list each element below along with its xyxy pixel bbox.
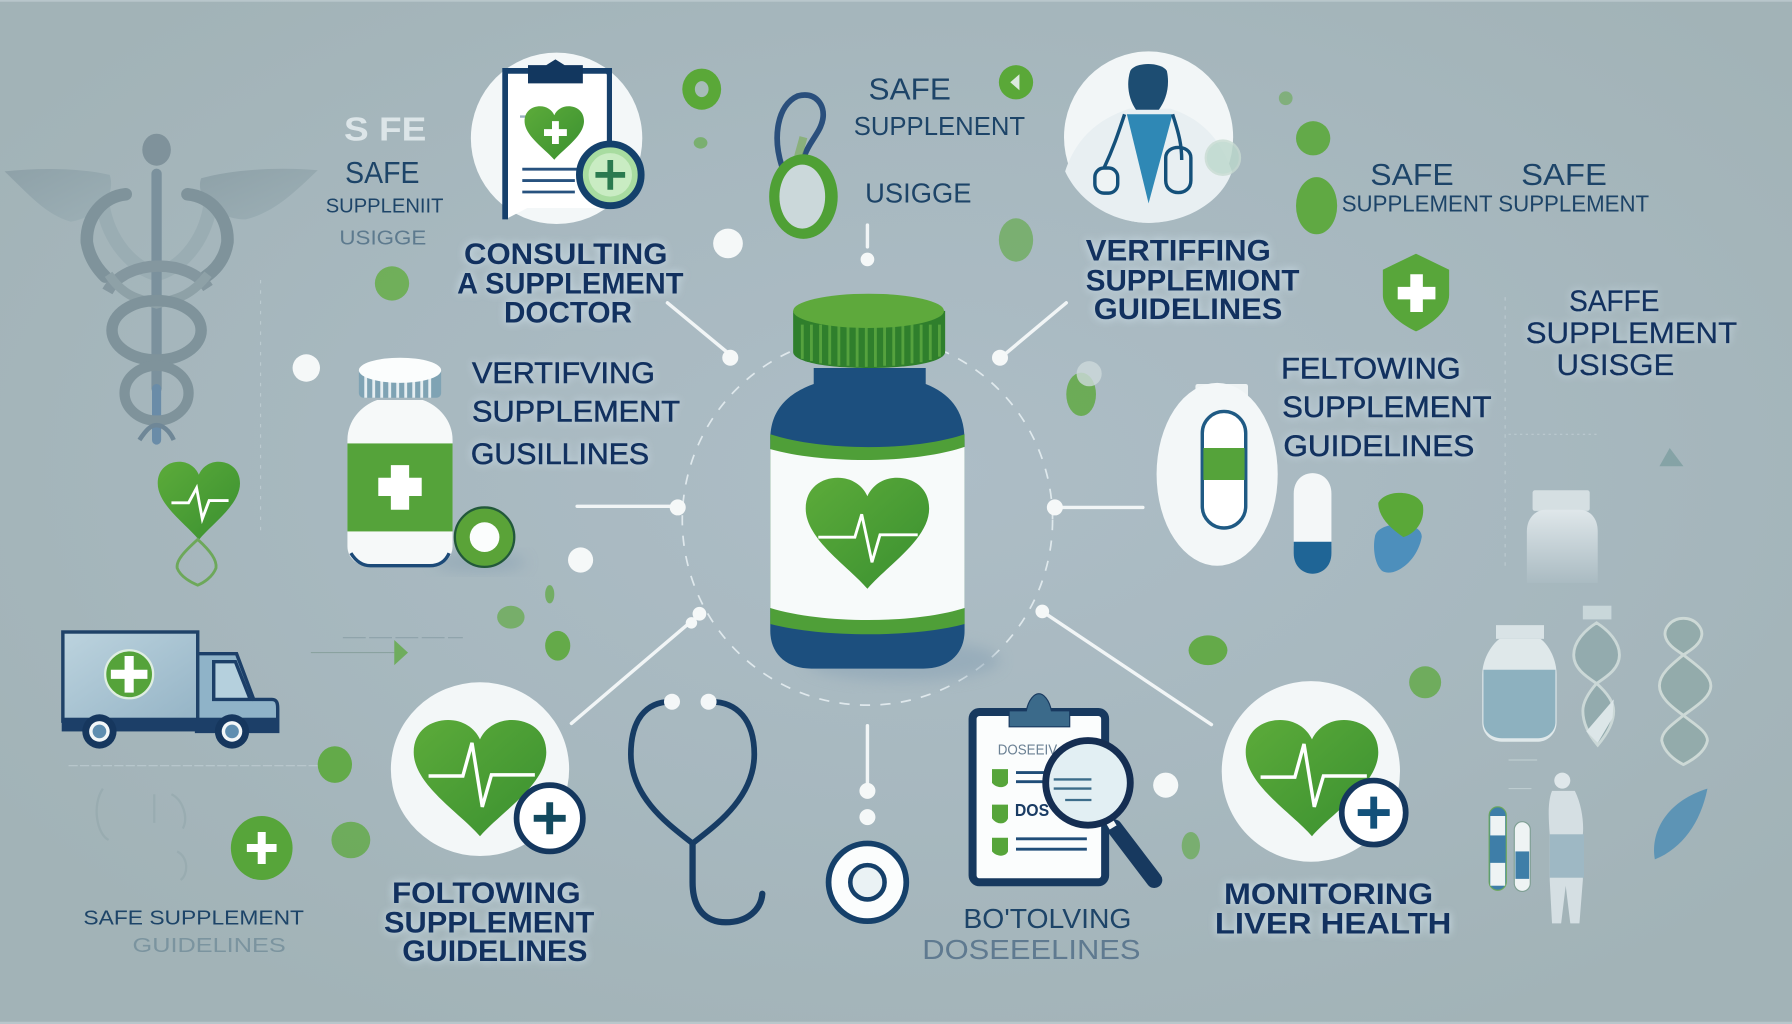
text block: twin safe supplement labels: SAFE	[1370, 157, 1454, 192]
icon: green blobs upper right	[694, 91, 1337, 416]
icon: scattered green blobs lower	[318, 585, 1441, 859]
label	[384, 877, 594, 968]
label: CONSULTING	[464, 238, 667, 271]
icon: faded bottle right	[1527, 490, 1598, 583]
text block: twin safe supplement labels: SAFE	[1521, 157, 1607, 192]
icon: green plus circle	[231, 816, 293, 880]
label: VERTIFFING	[1086, 235, 1271, 268]
icon: capsule disc and pills	[1157, 383, 1423, 574]
text block: twin safe supplement labels	[1342, 157, 1649, 216]
icon: pale bottle with liquid	[1482, 625, 1557, 742]
label: FELTOWING	[1281, 352, 1461, 385]
icon: target ring	[829, 843, 906, 921]
icon: helix one	[1574, 606, 1619, 745]
text block: top-centre safe supplement usage: SUPPLENENT	[854, 111, 1025, 141]
text block: twin safe supplement labels: SUPPLEMENT	[1342, 190, 1493, 216]
label: SUPPLEMENT	[1282, 391, 1491, 424]
text block: top-centre safe supplement usage: SAFE	[869, 71, 951, 106]
circle icon: heart with plus badge	[1222, 681, 1406, 862]
label: SUPPLEMIONT	[1086, 264, 1299, 297]
decorative faint guide lines	[69, 280, 1600, 880]
label	[922, 903, 1141, 965]
label: BO'TOLVING	[963, 903, 1131, 934]
label: GUIDELINES	[402, 935, 587, 968]
label	[1215, 878, 1451, 941]
icon: clipboard with magnifier: DOSEEIV	[998, 742, 1057, 758]
label: VERTIFVING	[472, 357, 655, 390]
icon: blue and white pills	[1489, 807, 1530, 891]
panel: following supplement guidelines (capsules)	[1157, 352, 1491, 574]
icon: stethoscope	[631, 694, 762, 922]
label: A SUPPLEMENT	[457, 268, 683, 301]
text block: right safe supplement usage: USISGE	[1557, 349, 1674, 382]
panel: verifying supplement guidelines (doctor)	[1064, 51, 1299, 326]
text block: safe supplement guidelines bottom-left: SAFE SUPPLEMENT	[83, 907, 304, 930]
label: FOLTOWING	[392, 877, 581, 910]
icon: bottle with plus	[347, 358, 526, 571]
panel: verifying supplement guidelines (left bottle)	[347, 357, 680, 571]
icon: caduceus	[5, 134, 318, 440]
panel: dosage guidelines	[922, 694, 1154, 965]
text block: safe supplement guidelines bottom-left: GUIDELINES	[133, 934, 286, 957]
text block: twin safe supplement labels: SUPPLEMENT	[1498, 190, 1649, 216]
text block: top-left safe supplement usage: SUPPLENIIT	[326, 195, 444, 218]
icon: green ring top	[682, 69, 721, 110]
text block: top-centre safe supplement usage: USIGGE	[865, 177, 971, 208]
panel: consulting a supplement doctor	[457, 53, 683, 329]
panel: following supplement guidelines (heart)	[384, 682, 594, 968]
icon: small grey-green marker	[1659, 448, 1683, 466]
text block: top-centre safe supplement usage	[854, 71, 1025, 208]
text block: safe supplement guidelines bottom-left	[83, 907, 304, 957]
icon: hook and ring	[769, 95, 838, 239]
label	[1281, 352, 1491, 463]
text block: right safe supplement usage: SAFFE	[1569, 285, 1659, 318]
connector lines and nodes	[293, 225, 1211, 825]
text block: top-left safe supplement usage: S FE	[344, 112, 426, 149]
label: MONITORING	[1224, 878, 1433, 911]
label	[471, 357, 680, 471]
text block: right safe supplement usage: SUPPLEMENT	[1526, 317, 1737, 350]
text block: top-left safe supplement usage: SAFE	[345, 155, 419, 190]
label with green bands	[770, 434, 965, 634]
circle icon: doctor with stethoscope	[1064, 51, 1240, 223]
label: LIVER HEALTH	[1215, 908, 1451, 941]
icon: small green badge top centre	[999, 65, 1033, 99]
label: DOSEEELINES	[922, 934, 1141, 965]
panel: monitoring liver health	[1215, 681, 1451, 941]
icon: blue leaf	[1654, 789, 1707, 859]
label	[1086, 235, 1299, 326]
icon: clipboard with magnifier: DOS	[1015, 800, 1049, 820]
bottle cap	[793, 294, 945, 368]
icon: helix two	[1659, 618, 1711, 765]
text block: top-left safe supplement usage: USIGGE	[339, 227, 426, 250]
icon: human figure	[1549, 773, 1584, 923]
label: DOCTOR	[504, 296, 632, 329]
central supplement bottle	[770, 294, 1000, 681]
label: SUPPLEMENT	[472, 396, 680, 429]
label: GUIDELINES	[1283, 430, 1474, 463]
icon: left green leaf blob	[375, 266, 409, 301]
icon: clipboard with magnifier	[973, 694, 1154, 882]
label: SUPPLEMENT	[384, 907, 594, 940]
text block: right safe supplement usage	[1526, 285, 1737, 382]
heart icon	[806, 478, 929, 589]
label	[457, 238, 683, 329]
label: GUIDELINES	[1094, 293, 1282, 326]
icon: left heart with helix	[158, 462, 240, 585]
text block: top-left safe supplement usage	[326, 112, 444, 250]
circle icon: heart with plus badge	[391, 682, 583, 856]
bottle body	[770, 368, 965, 669]
label: GUSILLINES	[471, 438, 649, 471]
circle icon: clipboard and heart	[471, 53, 642, 224]
icon: delivery truck	[62, 632, 278, 749]
icon: green shield with plus	[1383, 254, 1449, 331]
